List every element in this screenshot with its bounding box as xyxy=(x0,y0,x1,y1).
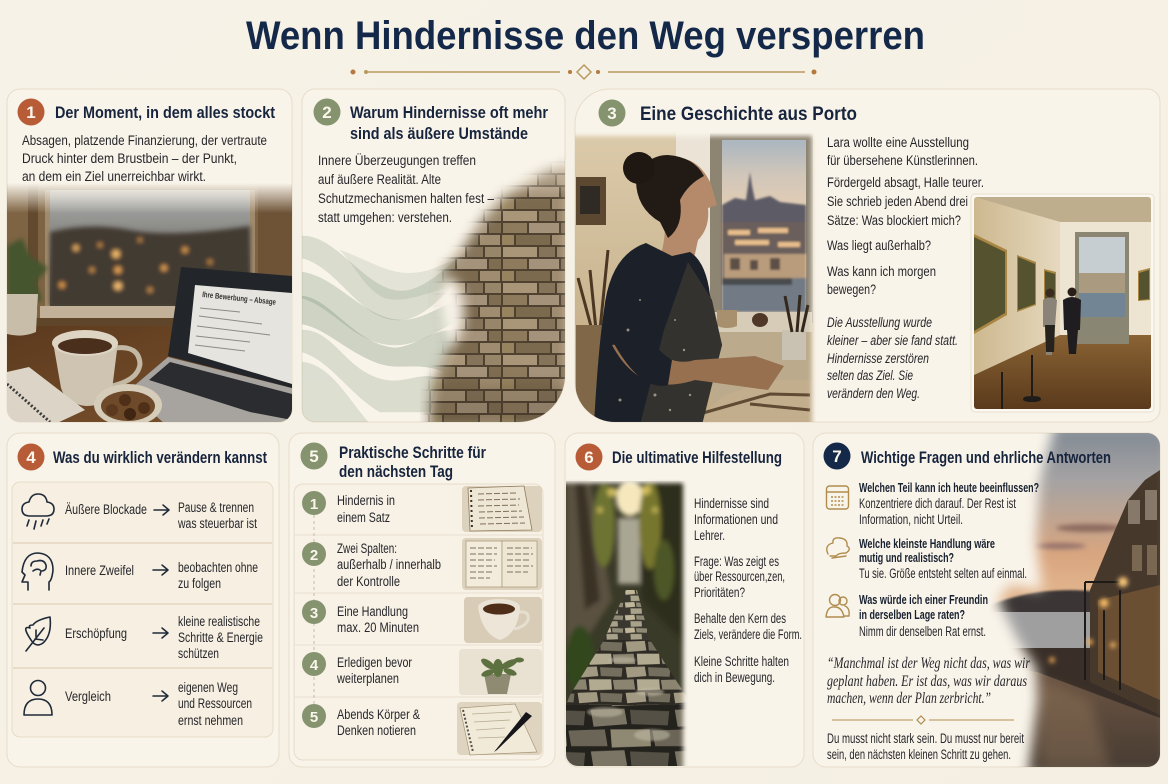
question 1: Welchen Teil kann ich heute beeinflussen? xyxy=(859,480,1039,495)
street lamps xyxy=(1085,582,1120,690)
title: Wenn Hindernisse den Weg versperren xyxy=(246,14,925,58)
badge 5 xyxy=(300,442,328,470)
body text 1: Absagen, platzende Finanzierung, der vertraute xyxy=(22,133,267,148)
mug xyxy=(52,330,140,406)
badge 2 xyxy=(314,98,340,126)
body text 6: dich in Bewegung. xyxy=(694,670,775,685)
body text 6: Frage: Was zeigt es xyxy=(694,554,779,569)
thumb: potted plant xyxy=(459,649,542,695)
step 5: Denken notieren xyxy=(337,723,416,738)
badge 7 xyxy=(824,442,850,470)
story text: Fördergeld absagt, Halle teurer. xyxy=(827,175,984,190)
body text 2: auf äußere Realität. Alte xyxy=(318,172,441,187)
body text 6: Prioritäten? xyxy=(694,585,745,600)
plant xyxy=(7,238,48,336)
closing text: Du musst nicht stark sein. Du musst nur bereit xyxy=(827,731,1024,746)
step 2: 2 xyxy=(310,547,318,564)
quote xyxy=(827,655,1031,707)
row: aeussere Blockade: Äußere Blockade xyxy=(65,502,147,517)
story italic conclusion: kleiner – aber sie fand statt. xyxy=(827,333,958,348)
pot on sill xyxy=(717,310,768,328)
photo: evening street in Porto xyxy=(992,433,1160,767)
thumb: coffee cup xyxy=(464,597,542,643)
step 4 xyxy=(302,649,542,695)
step 5: 5 xyxy=(310,709,318,726)
badge 4 xyxy=(18,444,44,470)
panel 2: warum Hindernisse xyxy=(302,89,570,430)
panel 1: der Moment xyxy=(7,89,292,426)
title ornament xyxy=(350,65,816,79)
heading 2: sind als äußere Umstände xyxy=(350,124,528,143)
city view xyxy=(722,172,806,312)
question 3: in derselben Lage raten? xyxy=(859,607,965,622)
heading 5: Praktische Schritte für xyxy=(339,443,486,462)
row: Erschoepfung: schützen xyxy=(178,646,219,661)
body text 6 xyxy=(694,496,802,685)
body text 2: Schutzmechanismen halten fest – xyxy=(318,191,494,206)
heading 5 xyxy=(339,443,486,481)
closing text xyxy=(827,731,1024,762)
row: aeussere Blockade: was steuerbar ist xyxy=(177,516,257,531)
step 2 xyxy=(302,538,542,590)
story text: für übersehene Künstlerinnen. xyxy=(827,153,978,168)
laptop xyxy=(128,267,292,424)
wet street reflection xyxy=(1040,680,1110,767)
panel 3: Geschichte aus Porto xyxy=(570,89,1160,425)
row: Erschoepfung: Erschöpfung xyxy=(65,626,127,641)
story text xyxy=(827,135,984,297)
heading 1: Der Moment, in dem alles stockt xyxy=(55,103,275,122)
row: Vergleich: und Ressourcen xyxy=(178,696,252,711)
photo: cobbled alley xyxy=(566,480,687,766)
story text: bewegen? xyxy=(827,282,876,297)
body text 2 xyxy=(318,153,494,225)
step 4: 4 xyxy=(310,657,319,674)
story text: Lara wollte eine Ausstellung xyxy=(827,135,969,150)
heading 2 xyxy=(350,103,548,143)
question 2: Welche kleinste Handlung wäre xyxy=(859,536,995,551)
shelf and picture xyxy=(576,177,606,225)
woman figure xyxy=(594,152,784,425)
row: Erschoepfung xyxy=(26,614,263,661)
brushes left xyxy=(578,250,608,330)
body text 1: Druck hinter dem Brustbein – der Punkt, xyxy=(22,151,237,166)
step 5: Abends Körper & xyxy=(337,707,420,722)
steps list xyxy=(294,484,543,760)
sill and desk xyxy=(712,312,812,332)
badge 4: 4 xyxy=(26,448,36,467)
badge 3 xyxy=(598,100,626,126)
body text 6: Ziels, verändere die Form. xyxy=(694,627,802,642)
brush jar xyxy=(782,295,808,360)
photo: rainy window with laptop xyxy=(7,180,292,426)
body text 1: an dem ein Ziel unerreichbar wirkt. xyxy=(22,169,206,184)
question 3: Was würde ich einer Freundin xyxy=(859,592,988,607)
question 1 xyxy=(826,480,1039,527)
body text 6: Lehrer. xyxy=(694,528,725,543)
body text 2: Innere Überzeugungen treffen xyxy=(318,153,476,168)
photo: woman at window xyxy=(570,125,820,425)
thumb: notebook and pen xyxy=(457,702,542,755)
icon: two people xyxy=(826,594,849,617)
story italic conclusion: Die Ausstellung wurde xyxy=(827,315,932,330)
thumb: open book xyxy=(462,538,542,590)
desk drawings xyxy=(703,392,810,422)
visitors xyxy=(1043,288,1081,355)
step 3: 3 xyxy=(310,605,318,622)
story text: Was liegt außerhalb? xyxy=(827,238,931,253)
step 2: außerhalb / innerhalb xyxy=(337,557,441,572)
badge 1: 1 xyxy=(26,103,36,122)
panel 7: Fragen und Antworten xyxy=(813,425,1168,780)
step 1 xyxy=(302,486,542,532)
row: Vergleich: ernst nehmen xyxy=(178,713,243,728)
badge 6: 6 xyxy=(584,448,594,467)
story italic conclusion xyxy=(827,315,958,401)
icon: cloud xyxy=(827,538,849,558)
illustration: veils and stone wall xyxy=(302,158,565,422)
question 2 xyxy=(827,536,1027,581)
icon: calendar xyxy=(826,486,848,509)
row: Vergleich: Vergleich xyxy=(65,689,111,704)
step 1: Hindernis in xyxy=(337,493,395,508)
panel 4: was du veraendern kannst xyxy=(7,433,279,767)
row: Vergleich: eigenen Weg xyxy=(178,680,238,695)
photo: gallery xyxy=(971,194,1154,412)
heading 2: Warum Hindernisse oft mehr xyxy=(350,103,548,122)
buildings xyxy=(1090,470,1160,715)
step 5 xyxy=(302,702,542,755)
row: aeussere Blockade xyxy=(22,494,257,531)
quote: machen, wenn der Plan zerbricht.” xyxy=(827,690,991,707)
heading 6: Die ultimative Hilfestellung xyxy=(612,448,782,467)
row: innere Zweifel xyxy=(22,553,258,591)
badge 1 xyxy=(18,98,44,126)
heading 3: Eine Geschichte aus Porto xyxy=(640,104,857,125)
story text: Was kann ich morgen xyxy=(827,264,936,279)
step 1: 1 xyxy=(310,496,318,513)
thumb: handwritten notebook xyxy=(462,486,542,532)
question 2: Tu sie. Größe entsteht selten auf einmal. xyxy=(859,566,1027,581)
rope posts xyxy=(1002,355,1040,409)
story text: Sie schrieb jeden Abend drei xyxy=(827,194,968,209)
laptop: Ihre Bewerbung – Absage xyxy=(202,290,277,307)
heading 5: den nächsten Tag xyxy=(339,462,453,481)
small divider ornament xyxy=(832,716,1014,724)
step 1: einem Satz xyxy=(337,510,390,525)
quote: geplant haben. Er ist das, was wir daraus xyxy=(827,673,1027,690)
step 2: Zwei Spalten: xyxy=(337,541,397,556)
story italic conclusion: verändern den Weg. xyxy=(827,386,920,401)
body text 6: Hindernisse sind xyxy=(694,496,769,511)
row: Erschoepfung: kleine realistische xyxy=(178,614,260,629)
badge 3: 3 xyxy=(607,104,617,123)
table of blockers xyxy=(12,482,273,737)
paintings xyxy=(974,234,1150,334)
step 3: max. 20 Minuten xyxy=(337,620,419,635)
step 4: weiterplanen xyxy=(336,671,399,686)
bowl xyxy=(94,384,162,426)
body text 6: Informationen und xyxy=(694,512,778,527)
closing text: sein, den nächsten kleinen Schritt zu gehen. xyxy=(827,747,1011,762)
question 3 xyxy=(826,592,988,639)
step 2: der Kontrolle xyxy=(337,574,400,589)
row: Erschoepfung: Schritte & Energie xyxy=(178,630,263,645)
badge 5: 5 xyxy=(309,447,319,466)
heading 4: Was du wirklich verändern kannst xyxy=(53,448,267,467)
question 3: Nimm dir denselben Rat ernst. xyxy=(859,624,986,639)
badge 2: 2 xyxy=(322,103,332,122)
question 1: Konzentriere dich darauf. Der Rest ist xyxy=(859,496,1016,511)
quote: “Manchmal ist der Weg nicht das, was wir xyxy=(827,655,1031,672)
panel 5: praktische Schritte xyxy=(289,433,555,767)
story text: Sätze: Was blockiert mich? xyxy=(827,213,961,228)
row: aeussere Blockade: Pause & trennen xyxy=(178,500,254,515)
row: Vergleich xyxy=(24,680,252,728)
story italic conclusion: Hindernisse zerstören xyxy=(827,351,929,366)
row: innere Zweifel: Innere Zweifel xyxy=(65,563,134,578)
story italic conclusion: selten das Ziel. Sie xyxy=(827,368,913,383)
body text 6: über Ressourcen,zen, xyxy=(694,569,785,584)
notebook xyxy=(7,367,85,424)
row: innere Zweifel: beobachten ohne xyxy=(178,560,258,575)
question 2: mutig und realistisch? xyxy=(859,550,954,565)
step 4: Erledigen bevor xyxy=(337,655,412,670)
row: innere Zweifel: zu folgen xyxy=(178,576,221,591)
body text 6: Behalte den Kern des xyxy=(694,611,786,626)
body text 1 xyxy=(22,133,267,184)
step 3 xyxy=(302,597,542,643)
step 3: Eine Handlung xyxy=(337,604,408,619)
panel 6: ultimative Hilfestellung xyxy=(560,433,804,771)
body text 2: statt umgehen: verstehen. xyxy=(318,210,452,225)
badge 6 xyxy=(576,444,602,470)
body text 6: Kleine Schritte halten xyxy=(694,654,789,669)
badge 7: 7 xyxy=(832,447,842,466)
question 1: Information, nicht Urteil. xyxy=(859,512,963,527)
